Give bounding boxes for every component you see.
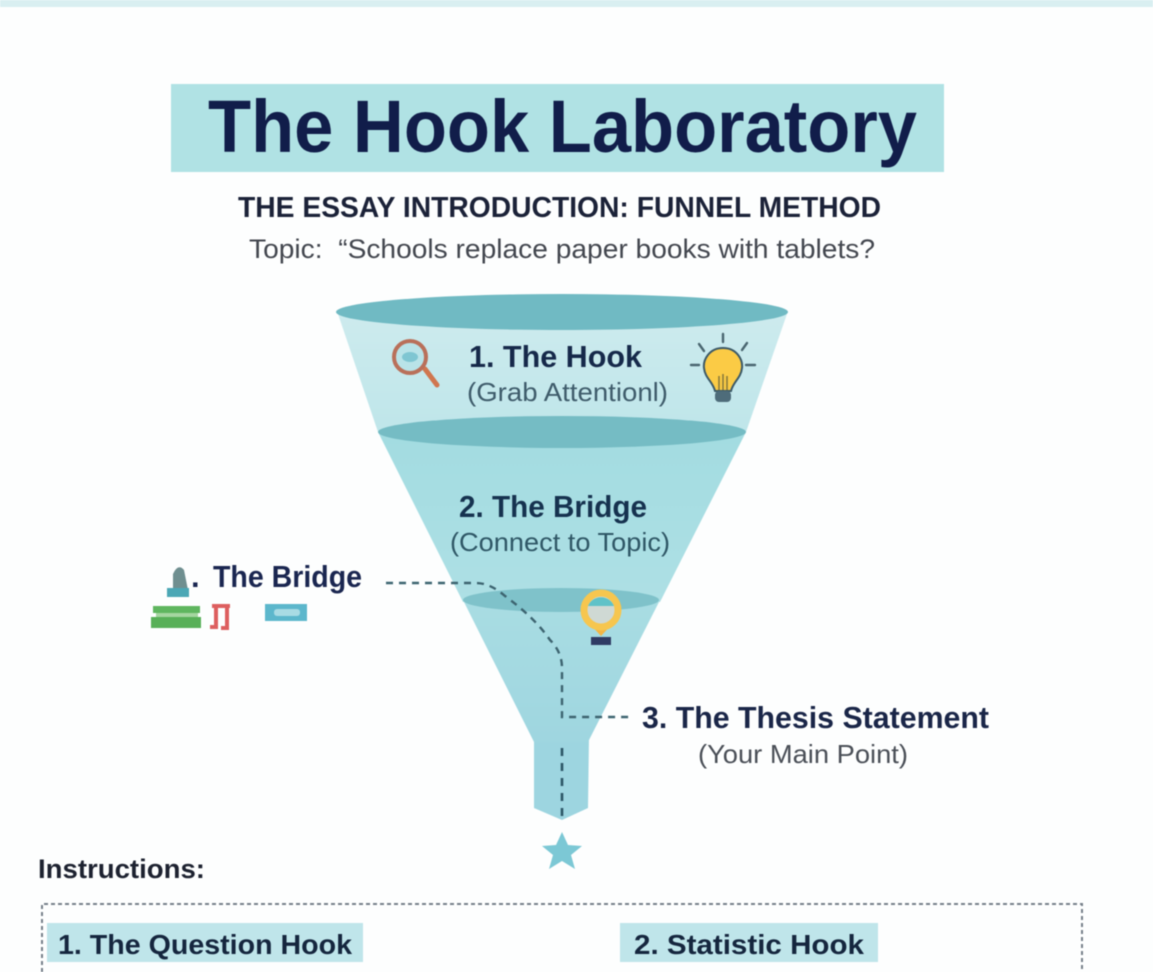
funnel second rim <box>378 416 746 448</box>
icon: star <box>542 832 582 869</box>
icon: blue tablet <box>265 604 307 621</box>
funnel top section <box>338 314 787 432</box>
step 3 heading: 3. The Thesis Statement <box>642 700 989 735</box>
funnel lower section <box>463 600 660 742</box>
title: The Hook Laboratory <box>208 85 917 168</box>
icon: small statue on books <box>167 567 189 597</box>
icon: yellow ring bulb <box>584 593 618 645</box>
left label: the bridge <box>151 559 362 628</box>
dashed connector: bridge to thesis <box>386 583 630 717</box>
funnel <box>336 294 788 820</box>
instructions heading: Instructions: <box>38 854 205 884</box>
step 1 heading: 1. The Hook <box>469 339 643 374</box>
top band <box>0 0 1153 7</box>
icon: magnifying glass <box>394 341 437 385</box>
funnel middle section <box>378 432 746 602</box>
icon: red music notes <box>210 606 230 628</box>
left label: the bridge: . <box>191 559 200 594</box>
hook card 2 label: 2. Statistic Hook <box>634 929 864 960</box>
instructions box <box>42 904 1082 972</box>
step 1 subheading: (Grab Attentionl) <box>467 377 668 407</box>
icon: green books <box>151 606 201 628</box>
subtitle: THE ESSAY INTRODUCTION: FUNNEL METHOD <box>238 192 881 224</box>
hook card 2 label <box>620 923 878 962</box>
step 2 subheading: (Connect to Topic) <box>450 527 670 557</box>
funnel neck <box>534 735 589 820</box>
step 3 subheading: (Your Main Point) <box>698 739 908 769</box>
hook card 1 label: 1. The Question Hook <box>58 929 352 960</box>
icon: light bulb <box>691 334 755 402</box>
step 2 heading: 2. The Bridge <box>459 489 647 524</box>
funnel top rim <box>336 294 788 330</box>
dashed line through neck <box>561 748 563 820</box>
left label: the bridge: The Bridge <box>213 559 362 594</box>
topic line: Topic: “Schools replace paper books with tablets? <box>249 234 875 264</box>
funnel third rim <box>463 588 659 612</box>
